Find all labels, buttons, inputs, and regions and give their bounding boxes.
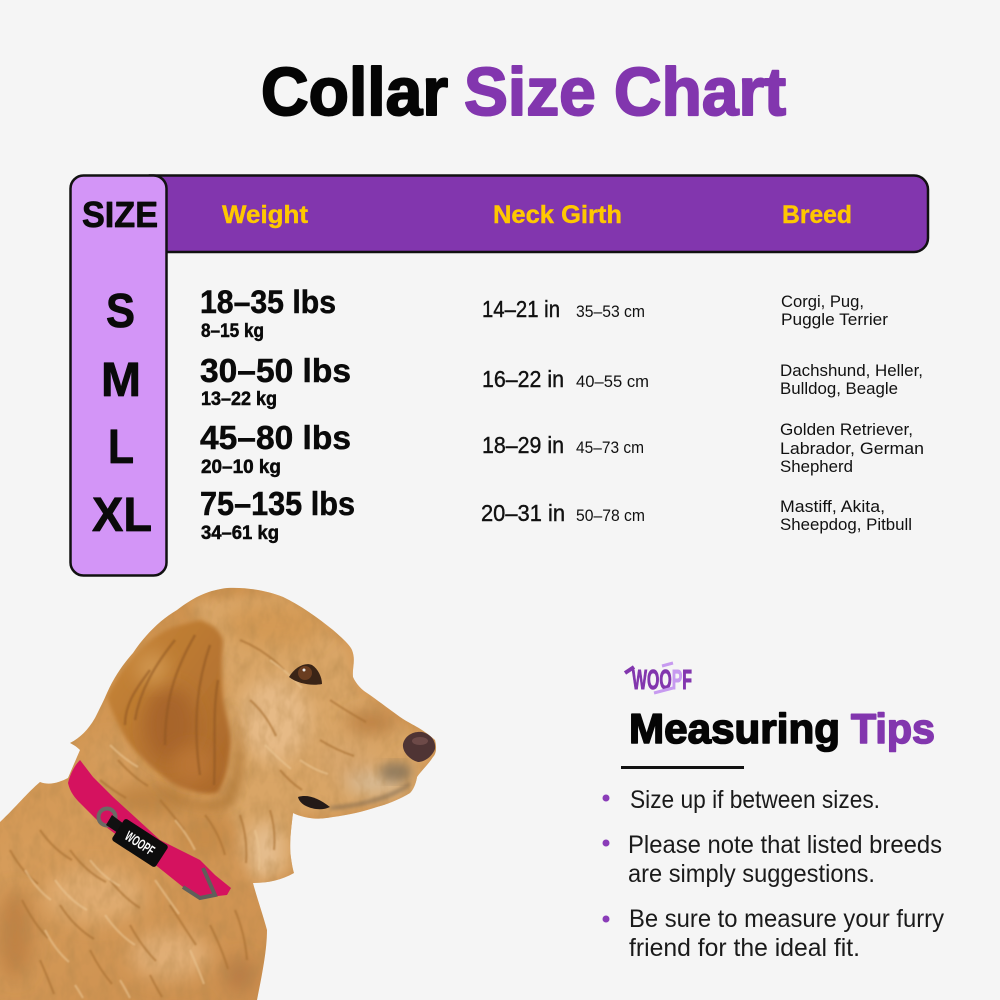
breed column: Bulldog, Beagle [780,379,898,398]
weight column: 13–22 kg [201,389,277,410]
breed column: Shepherd [780,457,853,476]
breed column: Labrador, German [780,439,924,458]
header bar [150,176,928,252]
size L: L [108,421,134,474]
collar label [111,818,169,868]
size S: S [106,285,135,338]
tip 3 [602,905,944,962]
muzzle speckle [380,762,412,782]
size chart table [70,176,928,576]
ear [107,620,231,794]
fur light and shadow patches [0,603,405,993]
breed column: Sheepdog, Pitbull [780,515,912,534]
weight column: 75–135 lbs [200,485,355,522]
neck girth column: 45–73 cm [576,438,644,457]
breed column: Puggle Terrier [781,310,888,329]
neck girth column: 14–21 in [482,296,560,322]
ear hair strokes [125,635,218,785]
ear shadow [175,712,247,812]
tip 2 [602,831,942,888]
neck girth column: 50–78 cm [576,506,645,525]
collar ring [98,808,116,826]
head [190,595,430,880]
size heading: SIZE [82,194,158,235]
weight column: 20–10 kg [201,457,281,478]
collar [68,760,231,898]
breed column: Mastiff, Akita, [780,497,885,516]
breed column: Corgi, Pug, [781,292,864,311]
weight column: 34–61 kg [201,523,279,544]
neck girth column: 40–55 cm [576,372,649,391]
breed column: Dachshund, Heller, [780,361,923,380]
tip 3: Be sure to measure your furry [629,905,944,933]
size XL: XL [92,489,152,542]
neck girth column: 16–22 in [482,366,564,392]
tips list [602,786,944,962]
measuring tips heading [629,705,935,752]
eye [289,664,322,685]
column heading: weight: Weight [222,201,309,229]
tip 2: Please note that listed breeds [628,831,942,859]
neck girth column [481,296,649,526]
collar label: WOOPF [122,828,158,859]
brand logo: WOOPF [632,664,692,695]
nose [403,732,435,762]
light hair strokes [25,660,328,998]
weight column: 45–80 lbs [200,419,351,456]
dark hair strokes [10,640,366,997]
breed column [780,292,924,534]
title: Size Chart [464,54,786,130]
weight column: 30–50 lbs [200,352,351,389]
neck girth column: 35–53 cm [576,302,645,321]
size column [70,176,166,576]
collar buckle [183,868,215,898]
mouth [298,796,330,809]
measuring tips heading: Tips [851,705,935,752]
dog photo: golden retriever wearing pink collar [0,580,440,1000]
tip 2: are simply suggestions. [628,860,875,888]
column heading: breed: Breed [782,201,852,229]
breed column: Golden Retriever, [780,420,913,439]
column heading: neck girth: Neck Girth [493,201,622,229]
tip 1: Size up if between sizes. [630,786,880,814]
neck girth column: 18–29 in [482,432,564,458]
tip 3: friend for the ideal fit. [629,934,860,962]
neck girth column: 20–31 in [481,500,565,526]
title: Collar [261,54,448,130]
title [261,54,786,130]
weight column [200,284,355,544]
measuring tips heading: Measuring [629,705,840,752]
weight column: 8–15 kg [201,321,264,342]
weight column: 18–35 lbs [200,284,336,320]
fine fur grain [0,580,440,1000]
size M: M [101,354,141,407]
heading underline [621,766,744,769]
